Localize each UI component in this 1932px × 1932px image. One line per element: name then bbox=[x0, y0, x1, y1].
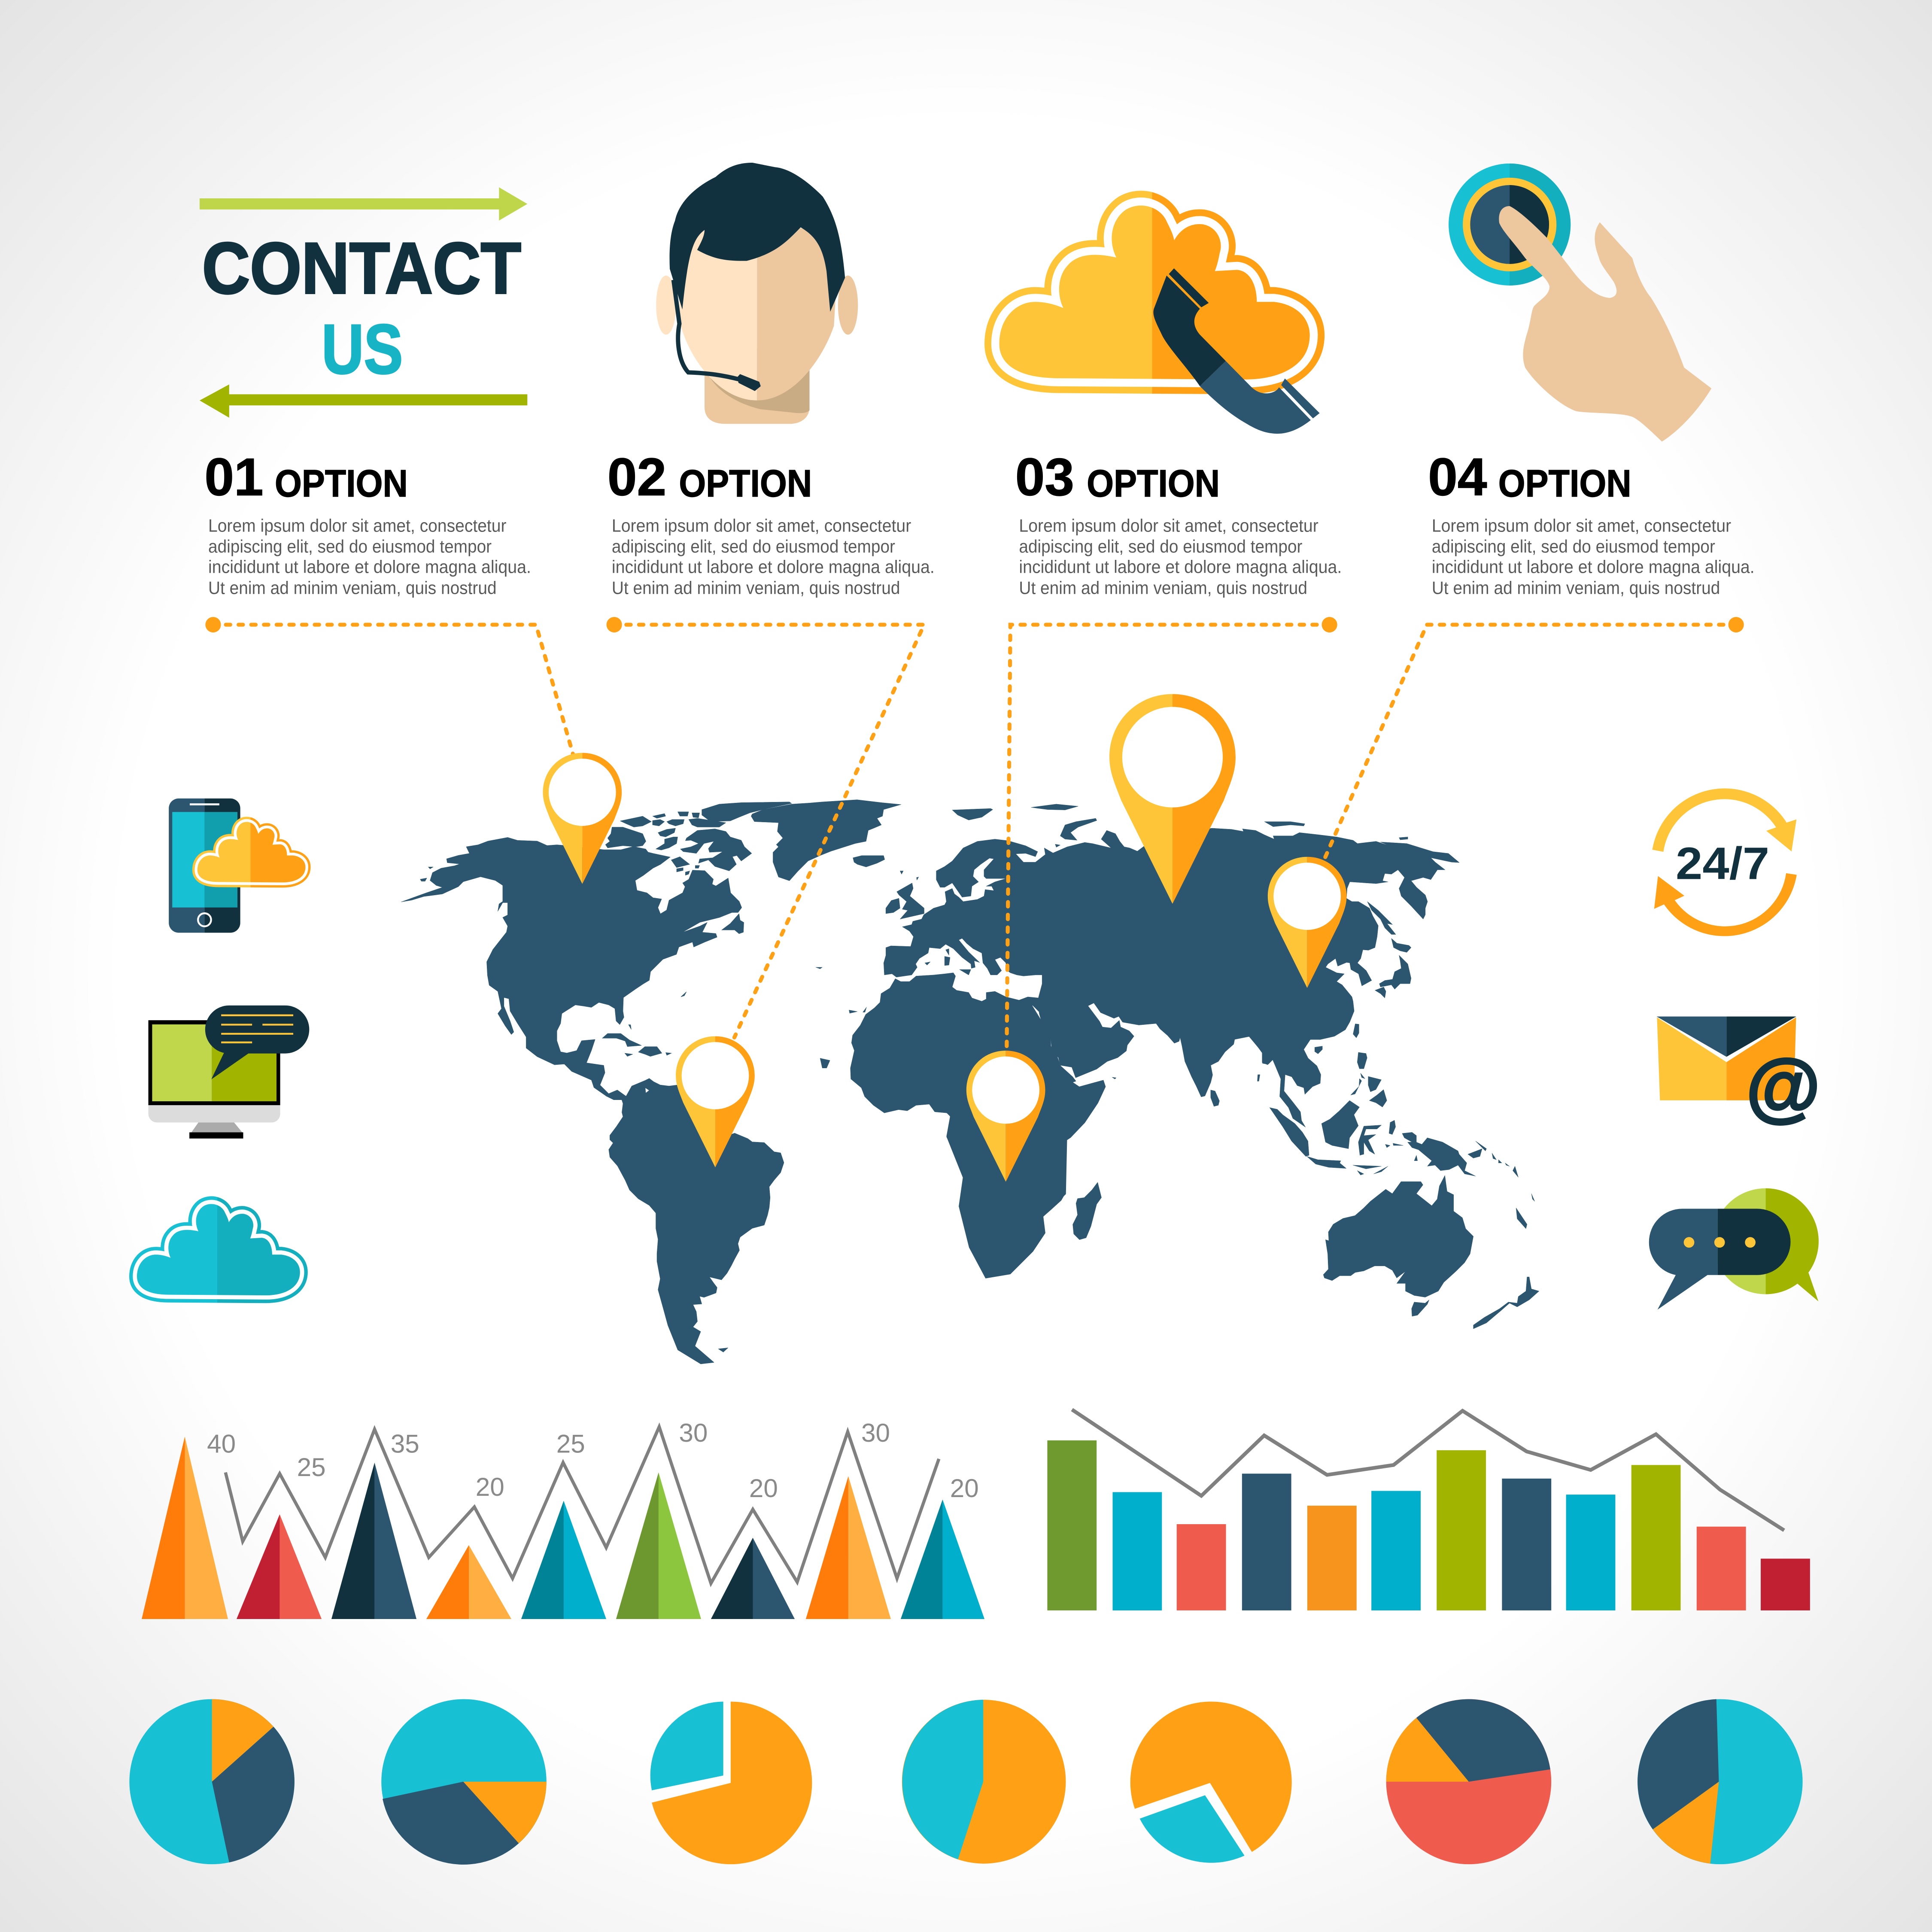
value labels: 20 bbox=[749, 1473, 778, 1503]
arctic islands, greenland and north atlantic bbox=[605, 800, 924, 1068]
southern africa bbox=[947, 1100, 1068, 1278]
heading: us: US bbox=[322, 310, 403, 389]
connector 04 bbox=[1324, 625, 1736, 859]
map pin 4 bbox=[1268, 857, 1347, 988]
value labels bbox=[207, 1418, 979, 1503]
pie chart 3 bbox=[650, 1701, 812, 1864]
map pin 5 bbox=[966, 1051, 1045, 1182]
arrow: top right bbox=[200, 187, 527, 221]
text block: option 04: incididunt ut labore et dolore magna aliqua. bbox=[1432, 557, 1755, 577]
text block: option 01: incididunt ut labore et dolore magna aliqua. bbox=[208, 557, 531, 577]
value labels: 25 bbox=[297, 1452, 326, 1482]
icon: blue cloud bbox=[137, 1204, 300, 1295]
text block: option 04 bbox=[1432, 515, 1755, 598]
bars bbox=[1047, 1440, 1810, 1610]
connector 02 bbox=[614, 625, 924, 1037]
pie chart 5 bbox=[1130, 1701, 1292, 1863]
text block: option 02: adipiscing elit, sed do eiusmod tempor bbox=[612, 536, 895, 556]
trend line bbox=[1072, 1410, 1784, 1530]
connector 01 bbox=[213, 625, 573, 754]
north america bbox=[401, 837, 742, 1100]
text block: option 03: incididunt ut labore et dolore magna aliqua. bbox=[1019, 557, 1342, 577]
icon: support agent head bbox=[656, 163, 858, 424]
option 03 bbox=[1015, 448, 1342, 598]
icon: telephone handset bbox=[1153, 268, 1320, 434]
text block: option 03: Lorem ipsum dolor sit amet, consectetur bbox=[1019, 515, 1318, 535]
value labels: 30 bbox=[679, 1418, 708, 1447]
pie chart 1 bbox=[129, 1699, 295, 1864]
icon: chat bubbles bbox=[1649, 1188, 1819, 1309]
option 02 bbox=[608, 448, 935, 598]
heading: 01 option: 01 bbox=[204, 448, 264, 507]
pie chart 6 bbox=[1386, 1699, 1551, 1864]
oceania and southeast asia bbox=[1270, 1052, 1539, 1329]
title: contact us bbox=[200, 187, 527, 418]
text block: option 04: Ut enim ad minim veniam, quis nostrud bbox=[1432, 577, 1720, 598]
text block: option 03: adipiscing elit, sed do eiusmod tempor bbox=[1019, 536, 1303, 556]
value labels: 40 bbox=[207, 1429, 236, 1458]
icon: 24/7: 24/7 bbox=[1676, 838, 1769, 889]
text block: option 03: Ut enim ad minim veniam, quis nostrud bbox=[1019, 577, 1307, 598]
text block: option 04: adipiscing elit, sed do eiusmod tempor bbox=[1432, 536, 1715, 556]
icon: smartphone with cloud bbox=[169, 799, 306, 933]
heading: 02 option: 02 bbox=[608, 448, 666, 507]
text block: option 01: Ut enim ad minim veniam, quis nostrud bbox=[208, 577, 497, 598]
value labels: 25 bbox=[556, 1429, 585, 1458]
text block: option 01: adipiscing elit, sed do eiusmod tempor bbox=[208, 536, 492, 556]
pie chart 4 bbox=[902, 1700, 1066, 1864]
text block: option 01: Lorem ipsum dolor sit amet, consectetur bbox=[208, 515, 507, 535]
option 01 bbox=[204, 448, 531, 598]
text block: option 04: Lorem ipsum dolor sit amet, consectetur bbox=[1432, 515, 1731, 535]
map pin 3 bbox=[1109, 694, 1236, 904]
value labels: 30 bbox=[861, 1418, 890, 1447]
icon: monitor with speech bubble bbox=[149, 1005, 309, 1139]
text block: option 02: incididunt ut labore et dolore magna aliqua. bbox=[612, 557, 935, 577]
middle east, south asia, east africa bbox=[987, 945, 1288, 1245]
europe, russia, north africa bbox=[851, 804, 1181, 1138]
value labels: 35 bbox=[391, 1429, 419, 1458]
heading: 03 option: 03 bbox=[1015, 448, 1074, 507]
heading: contact: CONTACT bbox=[202, 228, 521, 309]
world map bbox=[401, 800, 1539, 1364]
south america and caribbean bbox=[602, 992, 784, 1364]
connector 03 bbox=[1007, 625, 1330, 1054]
triangle chart bbox=[142, 1418, 984, 1619]
text block: option 03 bbox=[1019, 515, 1342, 598]
pie chart 7 bbox=[1637, 1699, 1803, 1864]
icon: hand pressing button bbox=[1449, 164, 1711, 442]
map pin 1 bbox=[543, 753, 622, 884]
icon: cloud with telephone bbox=[999, 206, 1320, 434]
text block: option 02: Lorem ipsum dolor sit amet, consectetur bbox=[612, 515, 911, 535]
option 03: OPTION bbox=[1087, 462, 1220, 505]
zigzag line bbox=[225, 1427, 939, 1583]
heading: 04 option: 04 bbox=[1428, 448, 1487, 507]
east asia bbox=[1159, 822, 1459, 1127]
value labels: 20 bbox=[476, 1472, 504, 1501]
pie chart 2 bbox=[381, 1699, 547, 1865]
connector end dots bbox=[205, 617, 1744, 632]
option 04: OPTION bbox=[1498, 462, 1631, 505]
text block: option 02 bbox=[612, 515, 935, 598]
map pin 2 bbox=[676, 1036, 755, 1167]
text block: option 01 bbox=[208, 515, 531, 598]
icon: 24/7 bbox=[1653, 788, 1797, 936]
option 01: OPTION bbox=[275, 462, 408, 505]
arrow: bottom left bbox=[200, 384, 527, 418]
text block: option 02: Ut enim ad minim veniam, quis nostrud bbox=[612, 577, 900, 598]
bar chart bbox=[1047, 1410, 1810, 1610]
option 04 bbox=[1428, 448, 1755, 598]
icon: envelope with at sign: @ bbox=[1746, 1044, 1820, 1129]
option 02: OPTION bbox=[679, 462, 812, 505]
triangles bbox=[142, 1437, 984, 1619]
dotted connector lines bbox=[213, 625, 1736, 1054]
icon: envelope with at sign bbox=[1657, 1017, 1820, 1129]
value labels: 20 bbox=[950, 1473, 979, 1503]
